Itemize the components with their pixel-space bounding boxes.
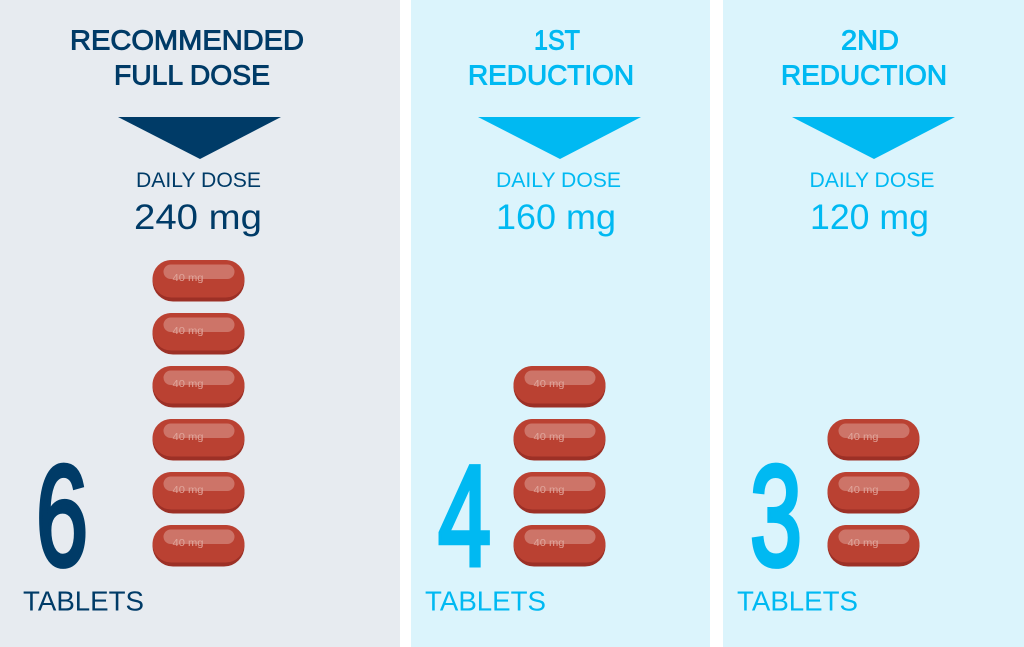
tablet — [152, 313, 244, 354]
tablet — [514, 419, 606, 460]
tablet: 40 mg — [534, 431, 565, 443]
value: 120 mg: 120 mg — [810, 198, 929, 237]
arrow: down triangle — [118, 117, 281, 159]
value: 240 mg: 240 mg — [134, 198, 262, 237]
heading: 1st reduction: 1ST — [534, 24, 580, 56]
tablet stack: 6 tablets — [152, 260, 244, 566]
tablet — [828, 472, 920, 514]
tablet — [514, 525, 606, 566]
arrow: down triangle — [478, 117, 641, 159]
panel: 2nd reduction — [723, 0, 1024, 647]
tablet: 40 mg — [172, 325, 204, 337]
heading: 2nd reduction — [781, 24, 947, 90]
tablet — [514, 366, 606, 408]
tablet: 40 mg — [172, 378, 204, 390]
count: 3: 3 — [750, 437, 802, 596]
tablet: 40 mg — [172, 484, 204, 496]
tablet — [152, 260, 244, 302]
tablet: 40 mg — [534, 484, 565, 496]
tablet: 40 mg — [172, 537, 204, 549]
label: daily dose: DAILY DOSE — [496, 169, 621, 192]
panel: 1st reduction — [411, 0, 710, 647]
tablet: 40 mg — [848, 431, 879, 443]
tablet stack: 3 tablets — [828, 419, 920, 566]
tablet: 40 mg — [534, 378, 565, 390]
panel: recommended full dose — [0, 0, 400, 647]
tablet — [152, 525, 244, 566]
heading: recommended full dose: FULL DOSE — [114, 60, 270, 90]
count: 6: 6 — [36, 437, 88, 596]
heading: recommended full dose — [70, 24, 304, 90]
heading: 1st reduction — [468, 24, 634, 90]
heading: 2nd reduction: REDUCTION — [781, 60, 947, 90]
tablet stack: 4 tablets — [514, 366, 606, 566]
label: daily dose: DAILY DOSE — [810, 169, 934, 192]
label: tablets: TABLETS — [737, 586, 858, 616]
tablet: 40 mg — [172, 272, 204, 284]
tablet — [828, 525, 920, 566]
tablet — [152, 472, 244, 514]
tablet — [152, 366, 244, 408]
label: tablets: TABLETS — [23, 586, 144, 616]
tablet — [828, 419, 920, 460]
heading: 1st reduction: REDUCTION — [468, 60, 634, 90]
tablet: 40 mg — [534, 537, 565, 549]
heading: 2nd reduction: 2ND — [841, 24, 899, 56]
count: 4: 4 — [438, 437, 491, 596]
label: daily dose: DAILY DOSE — [136, 169, 261, 192]
heading: recommended full dose: RECOMMENDED — [70, 24, 304, 56]
tablet — [152, 419, 244, 460]
arrow: down triangle — [792, 117, 955, 159]
tablet — [514, 472, 606, 514]
label: tablets: TABLETS — [425, 586, 546, 616]
tablet: 40 mg — [848, 484, 879, 496]
tablet: 40 mg — [172, 431, 204, 443]
tablet: 40 mg — [848, 537, 879, 549]
value: 160 mg: 160 mg — [496, 198, 616, 237]
